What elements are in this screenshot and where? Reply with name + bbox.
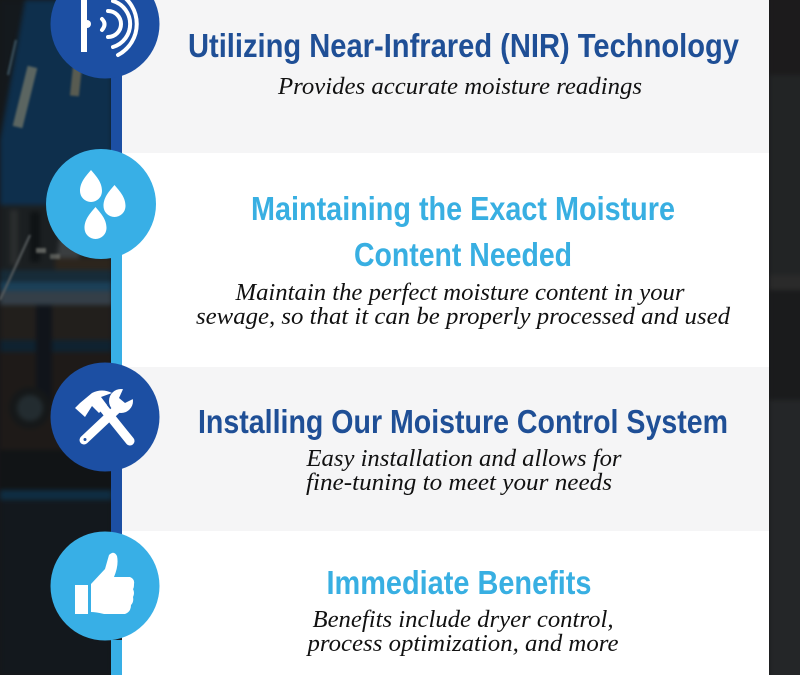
heading: NIR: Utilizing Near-Infrared (NIR) Technology <box>188 27 740 64</box>
icon: hammer and wrench <box>50 362 160 472</box>
icon: water drops <box>46 149 156 259</box>
text: installing description: Easy installation and allows for <box>305 446 622 472</box>
panel: moisture content <box>122 153 769 367</box>
heading: moisture content: Maintaining the Exact Moisture <box>251 190 675 227</box>
heading: benefits: Immediate Benefits <box>326 564 592 601</box>
text: moisture description line 2: sewage, so that it can be properly processed and used <box>196 304 731 330</box>
timeline bar: light segment 4 <box>111 640 122 675</box>
panel: installing <box>122 367 769 531</box>
timeline bar: light segment 2 <box>111 250 122 375</box>
text: benefits description line 2: process optimization, and more <box>305 631 619 657</box>
icon: NIR signal <box>50 0 160 78</box>
panel: NIR technology <box>122 0 769 153</box>
heading: installing: Installing Our Moisture Control System <box>198 403 728 440</box>
panel: benefits <box>122 531 769 675</box>
text: moisture description: Maintain the perfect moisture content in your <box>234 280 685 306</box>
icon: thumbs up <box>50 532 160 640</box>
text: benefits description: Benefits include dryer control, <box>312 607 614 633</box>
background photo: right dark panel <box>769 0 800 675</box>
heading: moisture content line 2: Content Needed <box>354 236 572 273</box>
timeline bar: dark segment 1 <box>111 60 122 160</box>
timeline bar: dark segment 3 <box>111 460 122 540</box>
text: NIR description: Provides accurate moisture readings <box>277 74 642 100</box>
background photo: left machinery <box>0 0 112 675</box>
text: installing description line 2: fine-tuning to meet your needs <box>306 470 612 496</box>
